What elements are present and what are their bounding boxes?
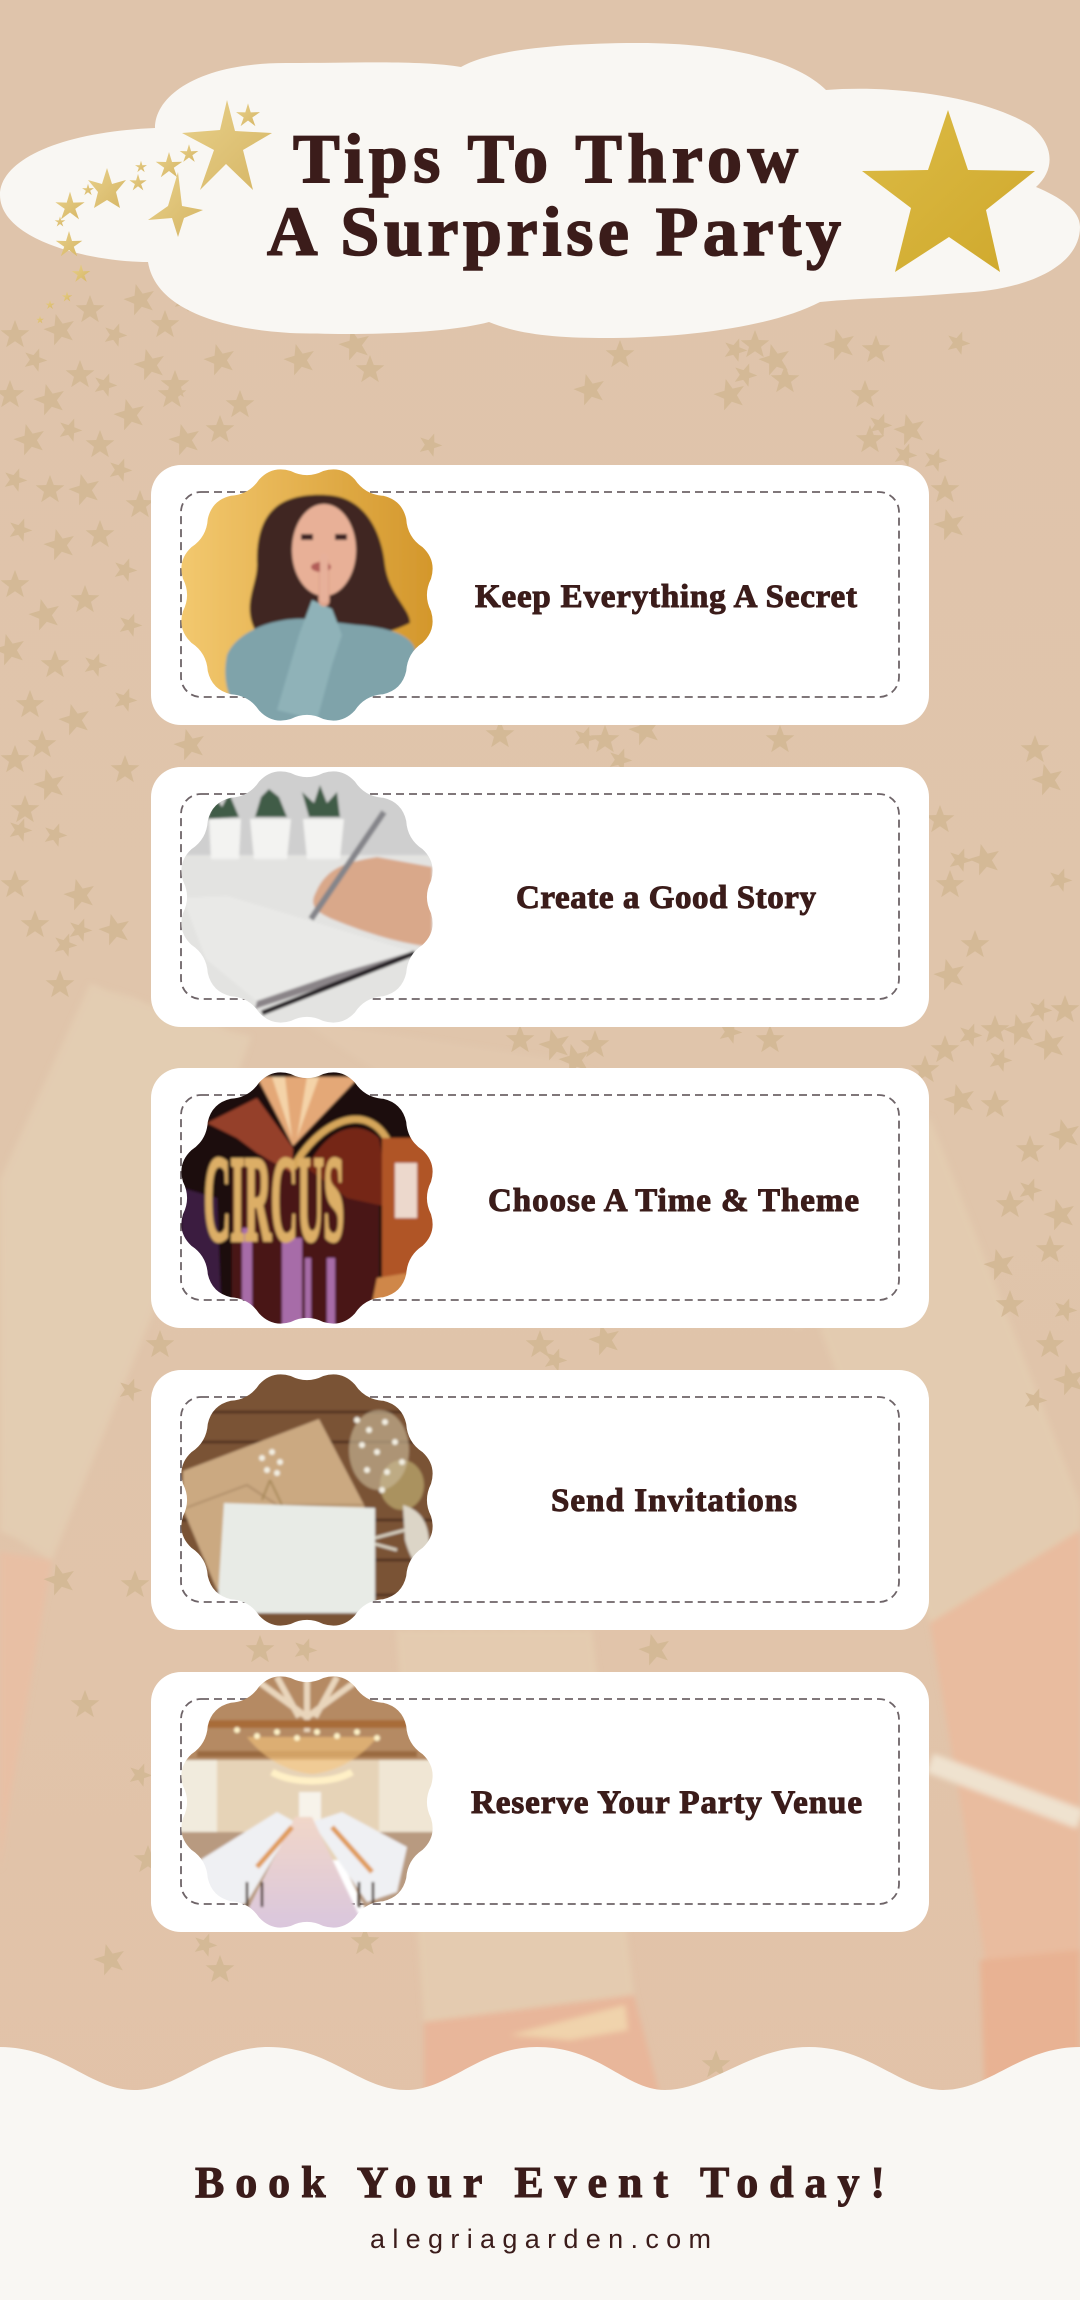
panel: tip 1 [151, 465, 929, 725]
footer call to action: Book Your Event Today! [195, 2158, 885, 2207]
title [267, 121, 841, 271]
header cloud [0, 43, 1080, 338]
footer band with wavy edge [0, 2047, 1080, 2300]
panel: tip 5 [151, 1672, 929, 1932]
photo: circus sign and stage curtains [177, 1068, 437, 1328]
photo: envelope and blank invitation card [177, 1370, 437, 1630]
tip text: Reserve Your Party Venue [471, 1785, 862, 1821]
panel: tip 2 [151, 767, 929, 1027]
tip text: Keep Everything A Secret [475, 579, 857, 615]
background: scattered gold stars [0, 280, 1080, 2077]
photo: woman shushing [177, 465, 437, 725]
tip text: Choose A Time & Theme [488, 1183, 859, 1219]
panel: tip 4 [151, 1370, 929, 1630]
photo: decorated party venue [177, 1672, 437, 1932]
icon: big gold star [862, 110, 1035, 272]
icon: trail of gold stars [36, 100, 272, 323]
tip text: Send Invitations [551, 1483, 797, 1519]
tip text: Create a Good Story [516, 880, 816, 916]
panel: tip 3: CIRCUS [204, 1132, 344, 1267]
panel: tip 3 [151, 1068, 929, 1328]
footer website: alegriagarden.com [370, 2224, 711, 2254]
title: Tips To Throw [293, 121, 798, 198]
photo: hand writing in notebook [177, 767, 437, 1027]
title: A Surprise Party [267, 194, 841, 271]
